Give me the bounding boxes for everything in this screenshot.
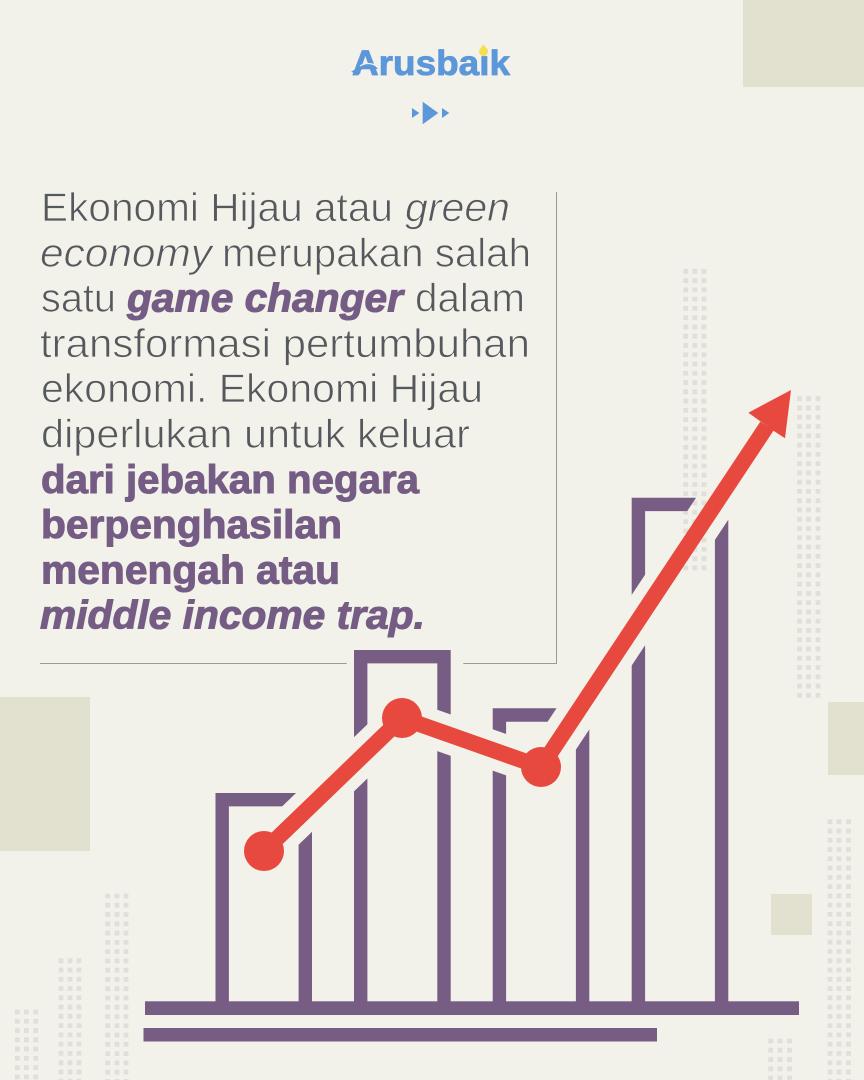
body text: Ekonomi Hijau atau bbox=[41, 186, 393, 230]
decorative dot columns bbox=[17, 269, 849, 1080]
body text: berpenghasilan bbox=[41, 503, 342, 547]
body text: transformasi pertumbuhan bbox=[40, 322, 530, 366]
body text: ekonomi. Ekonomi Hijau bbox=[41, 367, 483, 411]
logo: Arusbaik: Arusbaik bbox=[352, 44, 511, 83]
body text: satu bbox=[41, 277, 116, 321]
body text: green bbox=[405, 186, 510, 230]
body text: economy bbox=[40, 231, 214, 275]
text frame rule bbox=[40, 192, 556, 664]
body text: merupakan salah bbox=[222, 231, 531, 275]
body text: middle income trap. bbox=[40, 594, 425, 638]
body text: dalam bbox=[415, 277, 525, 321]
bar chart with rising arrow bbox=[144, 390, 799, 1042]
body text: menengah atau bbox=[41, 548, 340, 592]
body text: dari jebakan negara bbox=[41, 458, 420, 502]
icon: forward arrows bbox=[412, 102, 449, 124]
red trend line bbox=[244, 390, 791, 871]
body text: game changer bbox=[126, 277, 406, 321]
chart baseline bbox=[144, 1001, 799, 1042]
chart bars bbox=[222, 504, 722, 1005]
body text bbox=[40, 186, 531, 638]
body text: diperlukan untuk keluar bbox=[41, 412, 470, 456]
